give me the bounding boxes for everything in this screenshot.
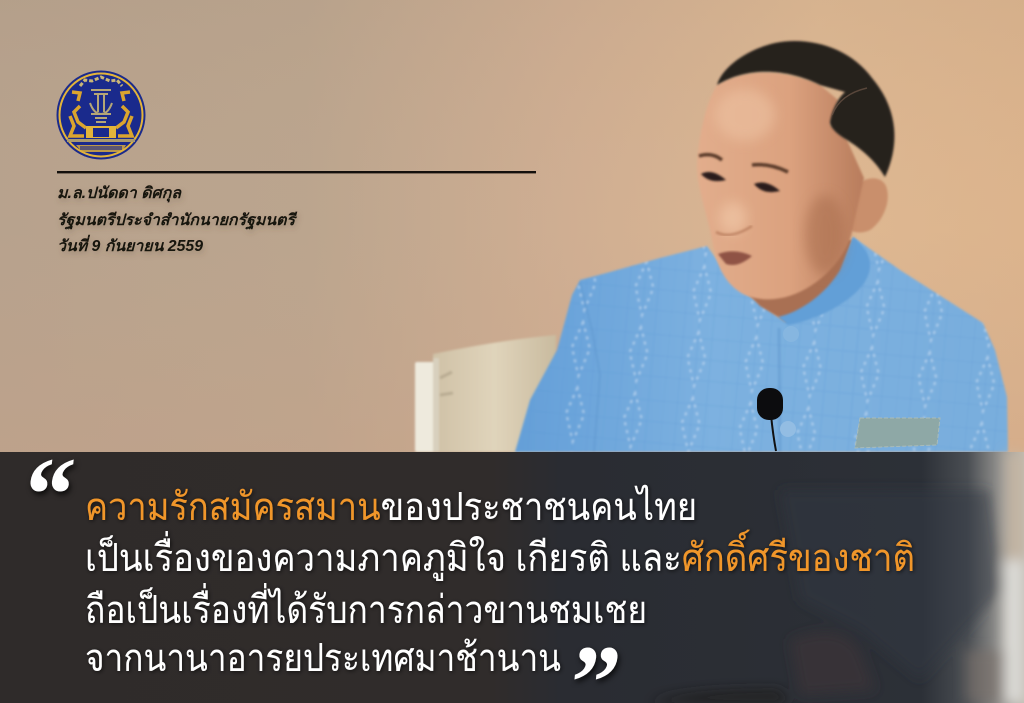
man: neck <box>735 235 852 322</box>
man: face <box>697 73 864 299</box>
divider line <box>57 171 536 173</box>
man: hair parting line <box>832 88 867 115</box>
man: mouth <box>718 251 752 265</box>
attribution text block <box>57 185 298 255</box>
man: nose highlight <box>719 202 747 234</box>
man: pocket square <box>855 418 940 448</box>
man: nose shadow <box>716 226 752 235</box>
photo background: wall <box>0 0 1024 460</box>
man: jacket buttons <box>780 326 799 437</box>
man: cheek shadow <box>805 195 845 275</box>
quote line 1: ความรักสมัครสมานของประชาชนคนไทย <box>85 485 697 529</box>
government emblem logo <box>56 70 146 160</box>
man: lapel microphone <box>757 388 783 451</box>
photo: armchair <box>415 335 556 452</box>
quote line 4: จากนานาอารยประเทศมาช้านาน <box>85 637 561 680</box>
emblem: right lion <box>116 92 132 136</box>
emblem: top flames <box>80 77 122 86</box>
quote line 3: ถือเป็นเรื่องที่ได้รับการกล่าวขานชมเชย <box>85 583 647 632</box>
quote line 2: เป็นเรื่องของความภาคภูมิใจ เกียรติ และศักดิ์ศรีของชาติ <box>85 529 915 581</box>
position: รัฐมนตรีประจำสำนักนายกรัฐมนตรี <box>57 211 298 230</box>
man: jacket <box>515 237 1008 452</box>
emblem: central pedestal <box>90 90 112 122</box>
man: ear <box>848 178 888 232</box>
ghost photo: arm and chair through band <box>650 452 1024 703</box>
quote band panel <box>0 452 1024 703</box>
date: วันที่ 9 กันยายน 2559 <box>57 234 203 255</box>
emblem: base <box>67 126 135 152</box>
emblem: left lion <box>70 92 86 136</box>
name: ม.ล.ปนัดดา ดิศกุล <box>57 185 183 203</box>
photo: man in blue silk jacket <box>515 41 1008 452</box>
man: hair <box>717 41 894 177</box>
quote text <box>85 485 915 680</box>
man: eyes and brows <box>699 155 788 192</box>
man: forehead highlight <box>715 89 775 141</box>
man: collar <box>778 237 870 325</box>
